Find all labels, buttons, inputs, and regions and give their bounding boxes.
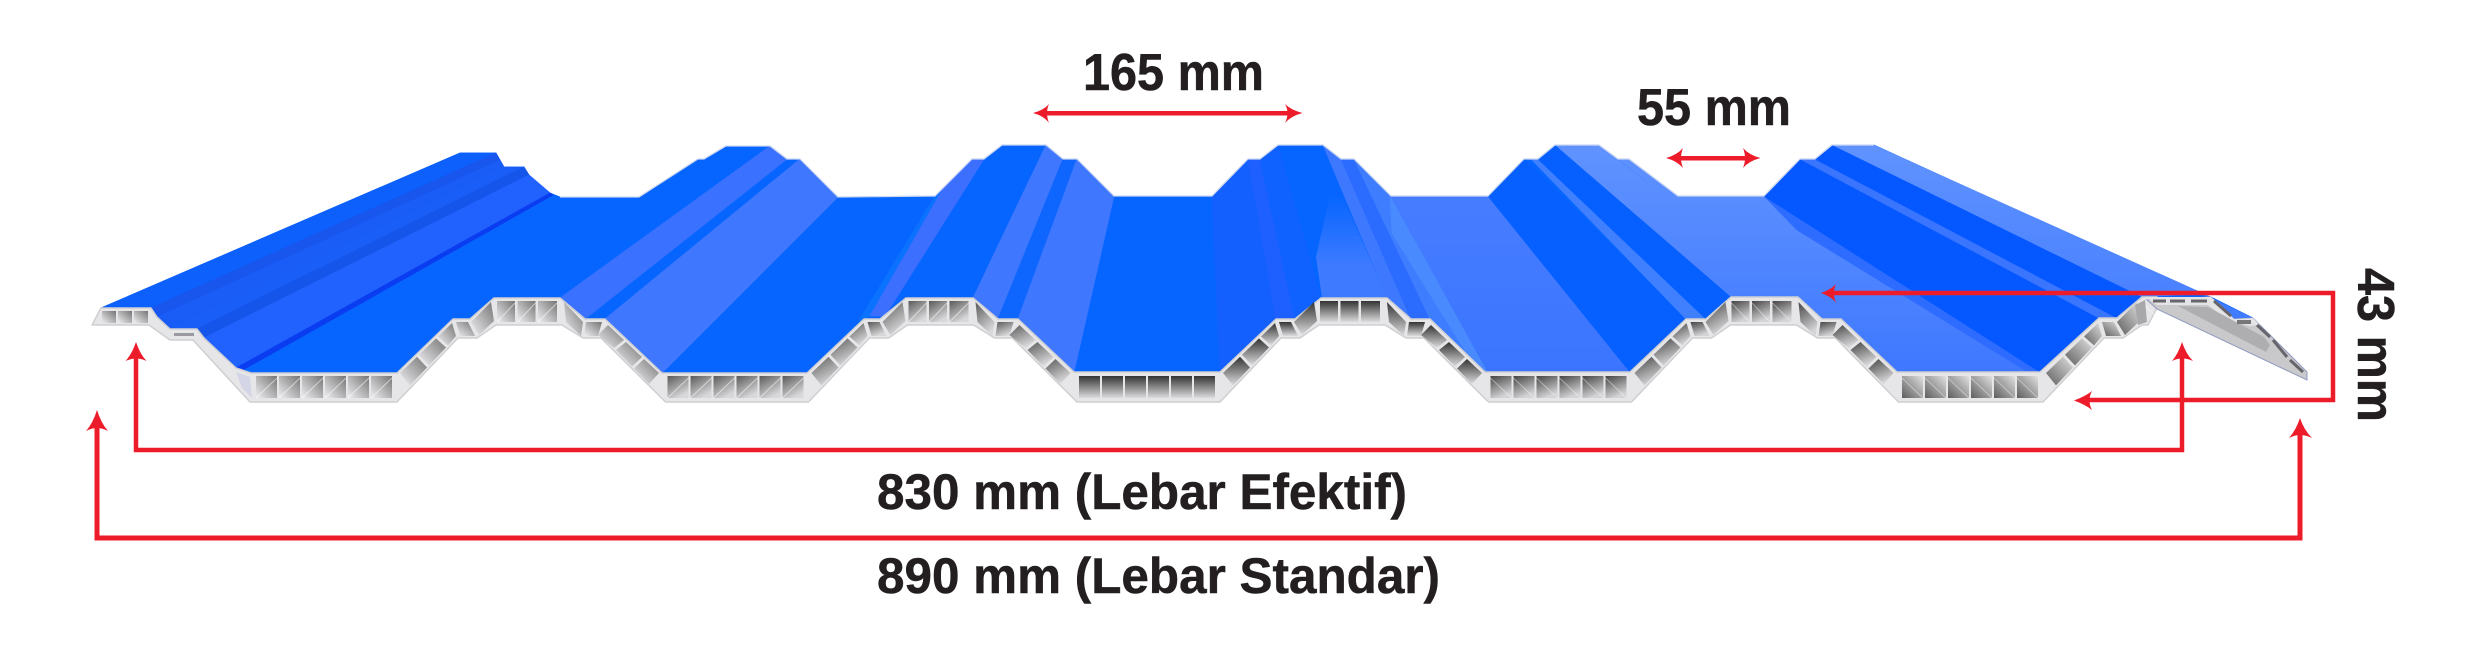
roof sheet xyxy=(92,145,2307,402)
blue top surface xyxy=(101,145,2253,373)
back edge highlight xyxy=(560,145,1874,197)
dimension: 830 mm label: 830 mm (Lebar Efektif) xyxy=(877,463,1407,520)
dimension: 890 mm label: 890 mm (Lebar Standar) xyxy=(877,547,1440,604)
arrow: 55 mm xyxy=(1666,148,1760,168)
dimension: 55 mm label: 55 mm xyxy=(1637,79,1791,137)
hollow cells period 2 xyxy=(668,301,1070,398)
hollow cells period 3 xyxy=(1079,301,1482,398)
dimension: 43 mm label: 43 mm xyxy=(2346,268,2404,422)
hollow cells period 5 xyxy=(1902,302,2203,398)
arrow: 165 mm xyxy=(1033,104,1302,123)
arrow: 830 mm effective width xyxy=(126,342,2193,450)
arrow: 890 mm standard width xyxy=(86,410,2312,538)
cross section body xyxy=(92,297,2157,402)
right folded tip xyxy=(2135,297,2307,380)
arrow: 43 mm height bracket xyxy=(1821,284,2333,410)
hollow cells period 1 xyxy=(256,301,659,398)
hollow cells period 4 xyxy=(1490,301,1894,398)
hollow cells left end xyxy=(102,311,252,398)
dimension: 165 mm label: 165 mm xyxy=(1083,44,1264,102)
